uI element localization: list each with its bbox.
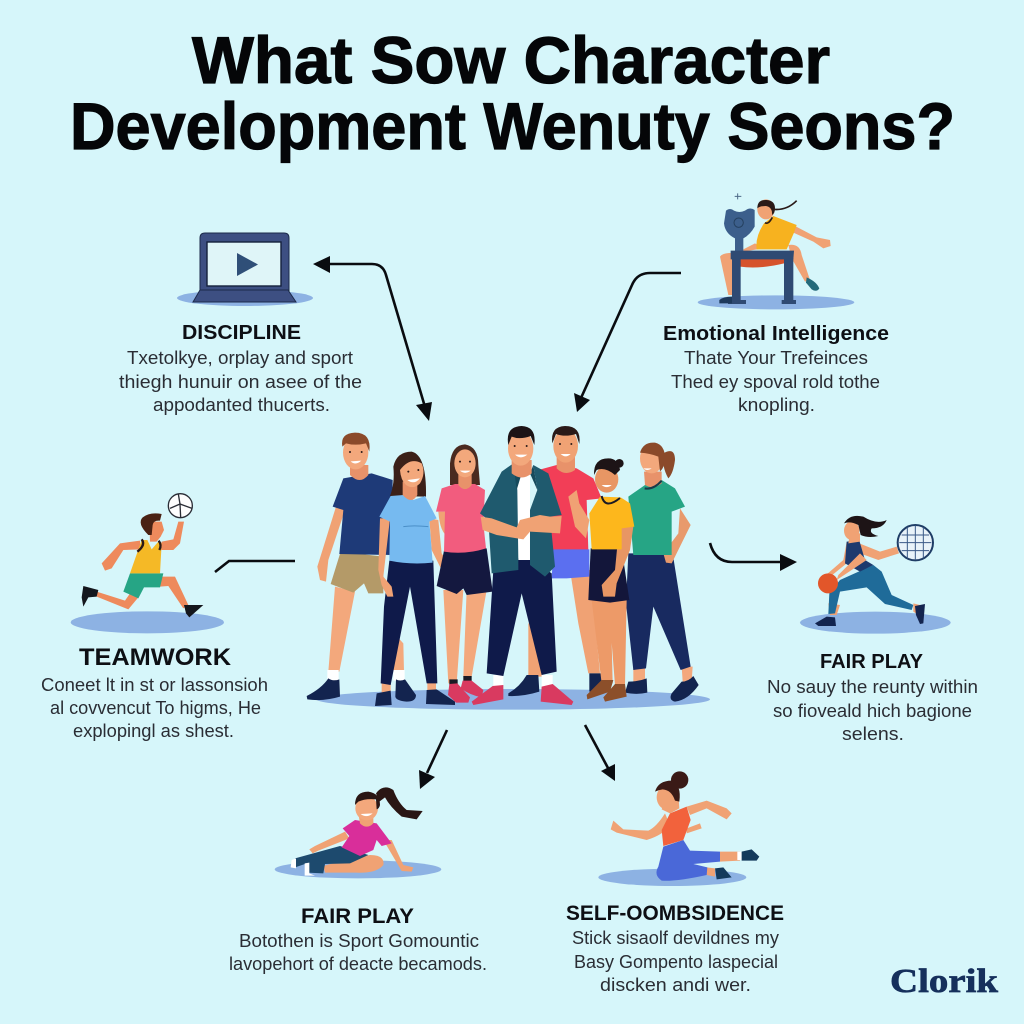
person: central man in teal shirt [472, 426, 573, 705]
arrow: team to player (left) [215, 561, 295, 572]
title: What Sow Character [192, 23, 830, 97]
heading and text: fair play right: selens. [842, 724, 904, 744]
person: man in navy shirt [307, 433, 416, 702]
heading and text: self-confidence: Stick sisaolf devildnes my [572, 928, 779, 948]
icon: laptop with play button [177, 233, 313, 306]
heading and text: fair play right [767, 651, 978, 744]
person: man in red shirt (back) [508, 426, 602, 696]
icon: tennis player with ball [800, 516, 951, 634]
arrow: athlete to team [574, 273, 681, 412]
heading and text: emotional intelligence: Emotional Intelligence [663, 323, 889, 345]
heading and text: fair play bottom: Botothen is Sport Gomountic [239, 931, 479, 951]
person: woman in blue shirt [375, 452, 455, 706]
heading and text: emotional intelligence [663, 323, 889, 415]
heading and text: emotional intelligence: Thed ey spoval rold tothe [671, 372, 880, 392]
icon: kneeling dancer [598, 771, 759, 886]
logo: Clorik [890, 963, 998, 1000]
heading and text: teamwork: explopingl as shest. [73, 721, 234, 741]
heading and text: self-confidence [566, 902, 784, 995]
heading and text: emotional intelligence: knopling. [738, 395, 815, 415]
heading and text: discipline [119, 322, 362, 415]
person: woman in yellow shirt [568, 458, 634, 702]
title [70, 23, 955, 163]
heading and text: fair play bottom: lavopehort of deacte becamods. [229, 954, 487, 974]
icon: seated girl stretching [275, 787, 441, 878]
heading and text: self-confidence: Basy Gompento laspecial [574, 952, 778, 972]
arrow: team to tennis player (right) [710, 543, 797, 571]
heading and text: fair play right: so fioveald hich bagione [773, 701, 972, 721]
heading and text: teamwork: TEAMWORK [79, 644, 232, 671]
ground shadow [317, 689, 710, 710]
icon: running basketball player [71, 494, 224, 633]
heading and text: teamwork [41, 644, 268, 741]
heading and text: fair play bottom: FAIR PLAY [301, 905, 414, 928]
icon: athlete on bench [698, 193, 854, 309]
heading and text: fair play bottom [229, 905, 487, 974]
title: Development Wenuty Seons? [70, 89, 955, 163]
heading and text: teamwork: al covvencut To higms, He [50, 698, 261, 718]
person: woman in pink shirt [436, 444, 493, 703]
person: woman in green shirt [625, 443, 699, 702]
arrow: laptop to team, double headed [313, 256, 432, 421]
heading and text: self-confidence: discken andi wer. [600, 975, 751, 995]
heading and text: discipline: Txetolkye, orplay and sport [127, 348, 353, 368]
arrow: team to seated girl [419, 730, 447, 789]
heading and text: discipline: thiegh hunuir on asee of the [119, 372, 362, 392]
arrow: team to dancer [585, 725, 615, 781]
heading and text: self-confidence: SELF-OOMBSIDENCE [566, 902, 784, 925]
heading and text: fair play right: No sauy the reunty within [767, 677, 978, 697]
heading and text: emotional intelligence: Thate Your Trefeinces [684, 348, 868, 368]
heading and text: teamwork: Coneet lt in st or lassonsioh [41, 675, 268, 695]
central team group [307, 426, 710, 710]
heading and text: discipline: appodanted thucerts. [153, 395, 330, 415]
heading and text: fair play right: FAIR PLAY [820, 651, 924, 673]
heading and text: discipline: DISCIPLINE [182, 322, 301, 344]
